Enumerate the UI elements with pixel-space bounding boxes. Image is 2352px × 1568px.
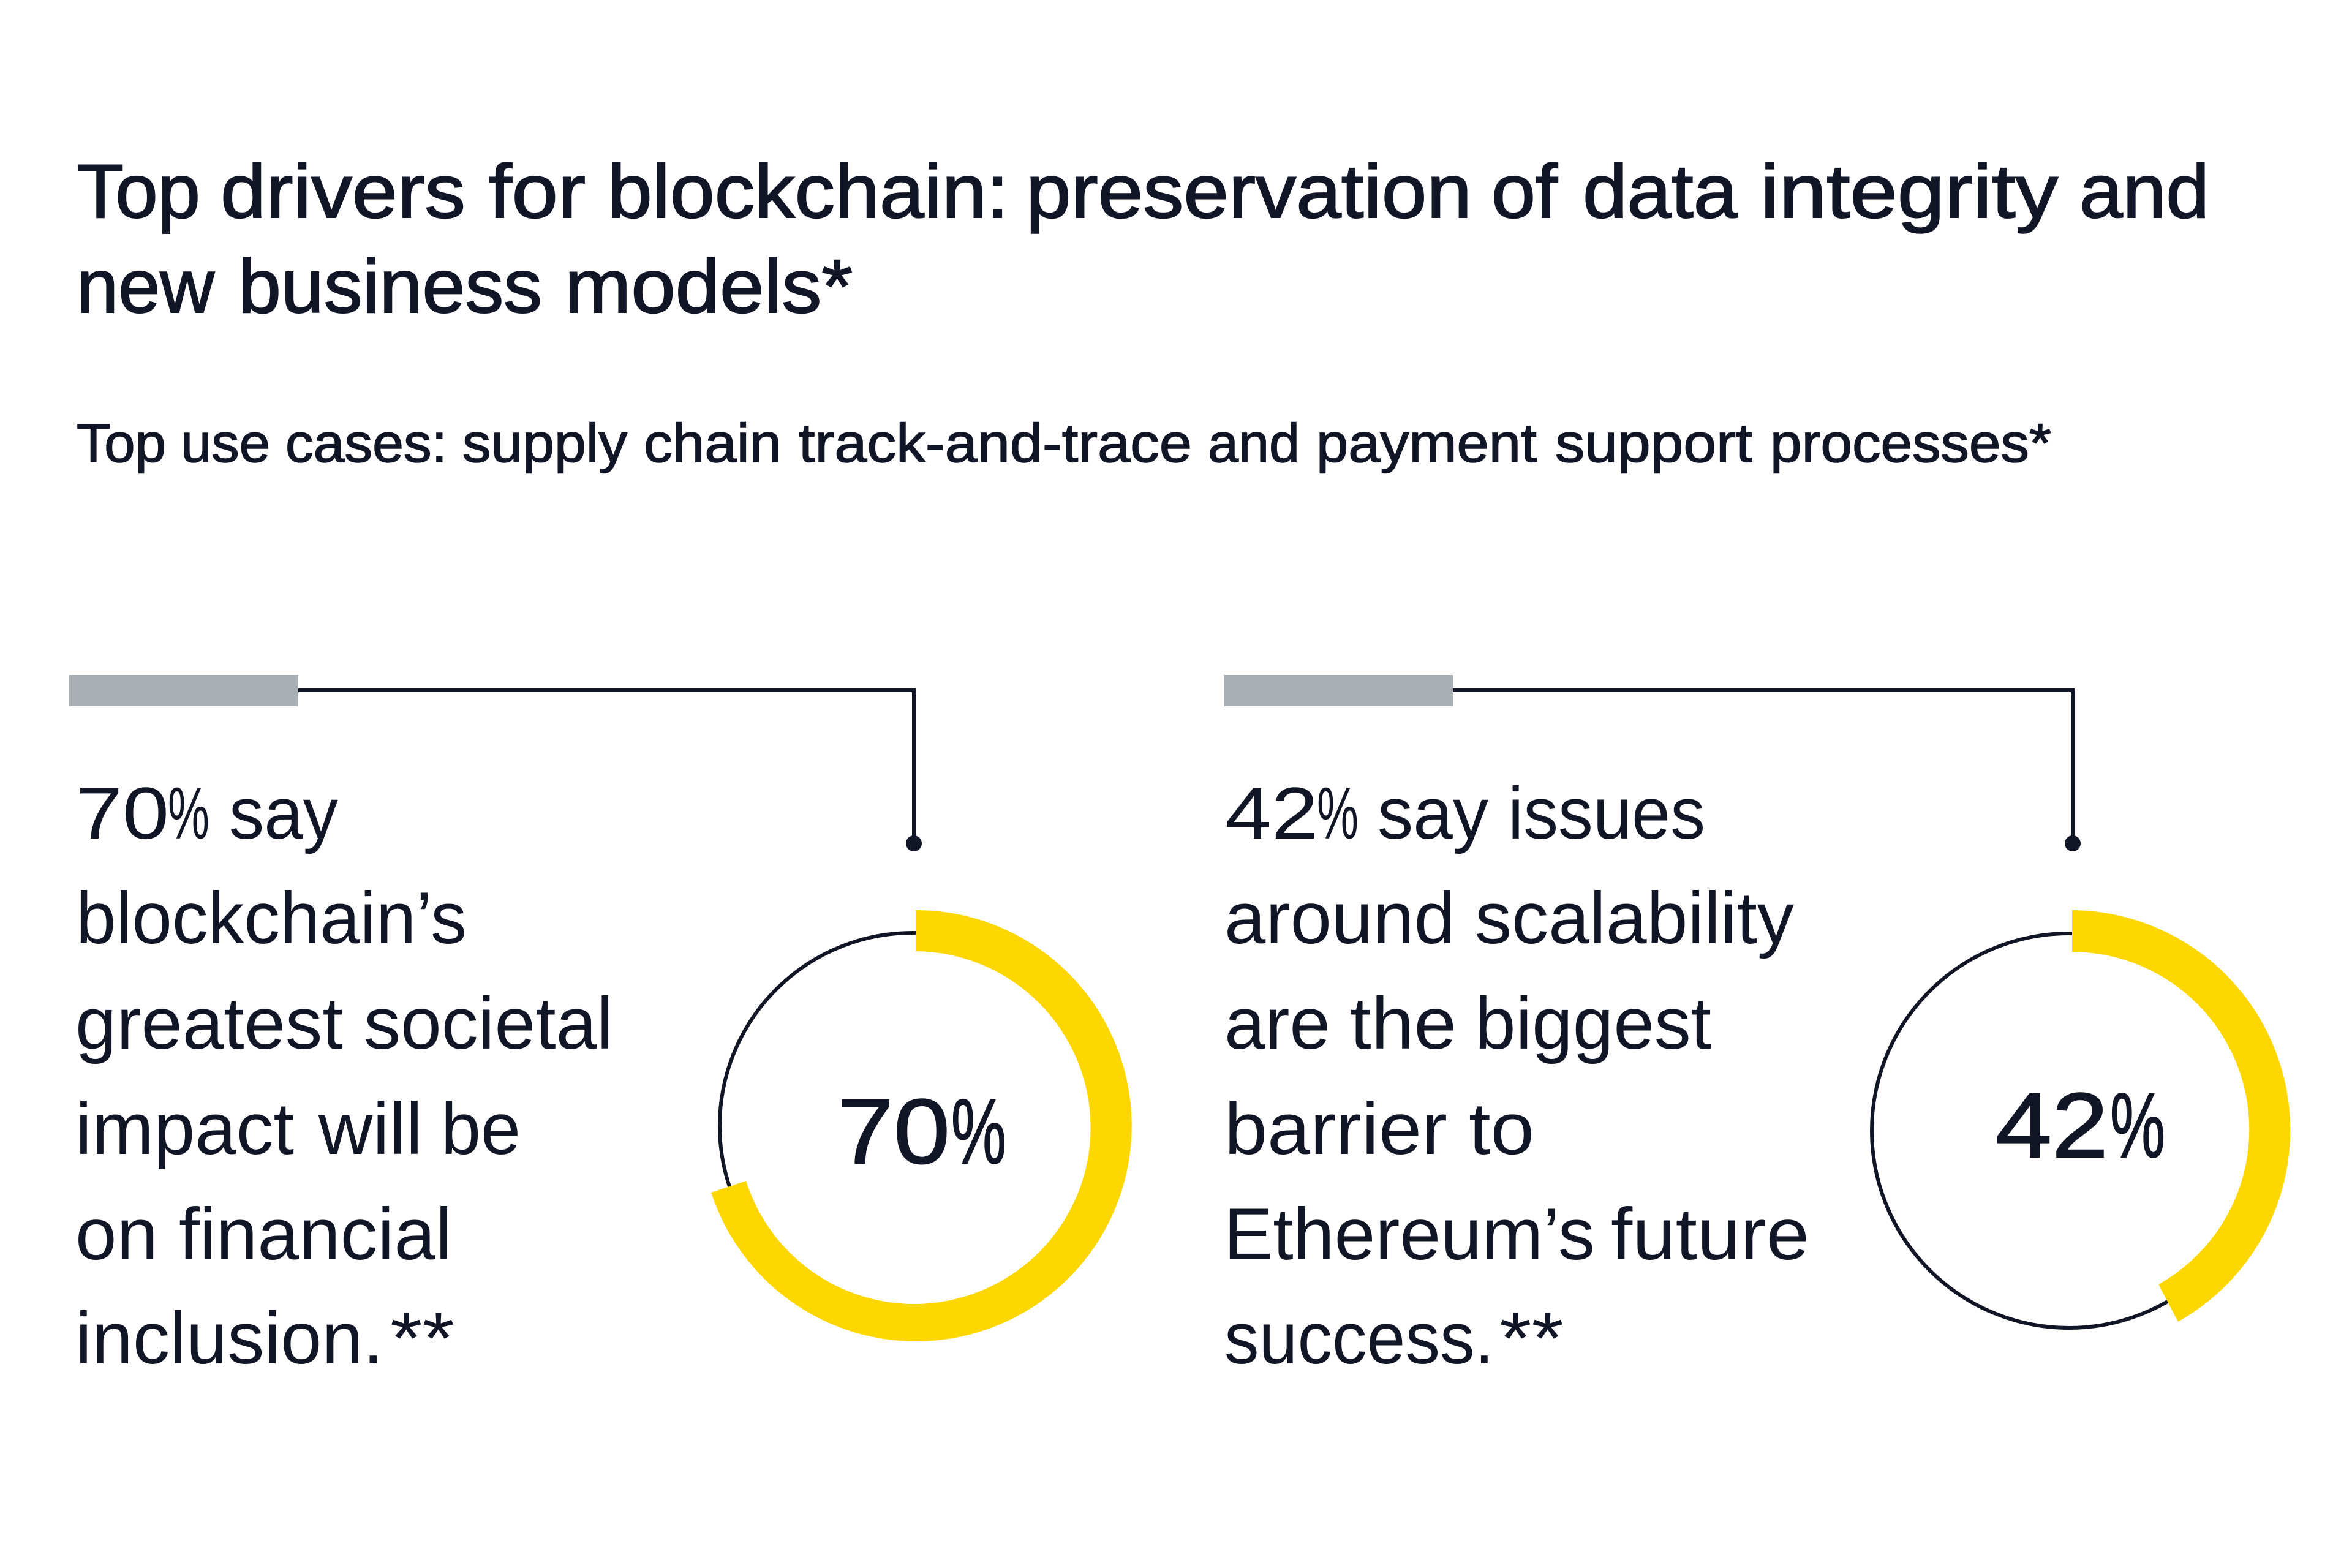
text block: 70% statement: say xyxy=(229,772,338,854)
text block: 70% statement xyxy=(75,772,613,1379)
subtitle: and xyxy=(1208,412,1300,473)
text block: 70% statement: on xyxy=(75,1193,158,1275)
subtitle: supply xyxy=(462,412,628,473)
text block: 42% statement: Ethereum’s xyxy=(1224,1193,1595,1275)
text block: 42% statement: ** xyxy=(1499,1297,1564,1379)
text block: 42% statement: are xyxy=(1224,982,1330,1065)
subtitle: use xyxy=(181,412,270,473)
text block: 70% statement: inclusion. xyxy=(75,1297,383,1379)
text block: 70% statement: be xyxy=(441,1088,521,1170)
text block: 42% statement: issues xyxy=(1508,772,1705,854)
text block: 42% statement: to xyxy=(1469,1088,1534,1170)
subtitle: track-and-trace xyxy=(799,412,1192,473)
donut chart: 70% xyxy=(711,910,1132,1341)
text block: 42% statement: say xyxy=(1378,772,1488,854)
title: preservation xyxy=(1026,149,1472,234)
text block: 42% statement: around xyxy=(1224,877,1455,959)
text block: 70% statement: will xyxy=(318,1088,423,1170)
title: Top xyxy=(77,149,200,234)
connector line with dot xyxy=(1453,690,2081,851)
title: new xyxy=(77,244,214,329)
text block: 70% statement: 70 xyxy=(76,772,169,854)
title: models* xyxy=(565,244,853,329)
grey header bar xyxy=(69,675,298,706)
title: integrity xyxy=(1760,149,2058,234)
panel: 42% scalability barrier xyxy=(1224,675,2290,1379)
subtitle: cases: xyxy=(285,412,447,473)
text block: 42% statement: future xyxy=(1611,1193,1809,1275)
title xyxy=(77,149,2209,329)
connector line with dot xyxy=(298,690,922,851)
subtitle: processes* xyxy=(1770,412,2051,473)
panel: 70% financial inclusion xyxy=(69,675,1132,1379)
text block: 70% statement: ** xyxy=(390,1297,454,1379)
subtitle: payment xyxy=(1316,412,1537,473)
text block: 70% statement: % xyxy=(168,772,209,854)
subtitle: support xyxy=(1555,412,1752,473)
title: drivers xyxy=(221,149,466,234)
title: blockchain: xyxy=(608,149,1009,234)
subtitle: chain xyxy=(644,412,782,473)
donut chart: 42% xyxy=(1872,910,2290,1328)
text block: 42% statement: % xyxy=(1317,772,1359,854)
text block: 70% statement: societal xyxy=(364,982,613,1065)
grey header bar xyxy=(1224,675,1453,706)
subtitle: Top xyxy=(77,412,166,473)
text block: 70% statement: financial xyxy=(179,1193,452,1275)
text block: 42% statement: barrier xyxy=(1224,1088,1447,1170)
text block: 42% statement: the xyxy=(1350,982,1457,1065)
text block: 70% statement: greatest xyxy=(75,982,343,1065)
text block: 70% statement: blockchain’s xyxy=(76,877,467,959)
title: business xyxy=(238,244,542,329)
donut chart: 70%: 70 xyxy=(837,1080,950,1183)
title: and xyxy=(2079,149,2209,234)
text block: 42% statement: success. xyxy=(1224,1297,1494,1379)
text block: 42% statement: scalability xyxy=(1475,877,1794,959)
title: data xyxy=(1583,149,1738,234)
donut chart: 70%: % xyxy=(951,1080,1006,1183)
text block: 42% statement xyxy=(1224,772,1809,1379)
text block: 70% statement: impact xyxy=(75,1088,294,1170)
donut chart: 42%: % xyxy=(2110,1074,2165,1177)
title: of xyxy=(1491,149,1558,234)
title: for xyxy=(489,149,586,234)
text block: 42% statement: biggest xyxy=(1475,982,1711,1065)
text block: 42% statement: 42 xyxy=(1225,772,1318,854)
donut chart: 42%: 42 xyxy=(1996,1074,2108,1177)
